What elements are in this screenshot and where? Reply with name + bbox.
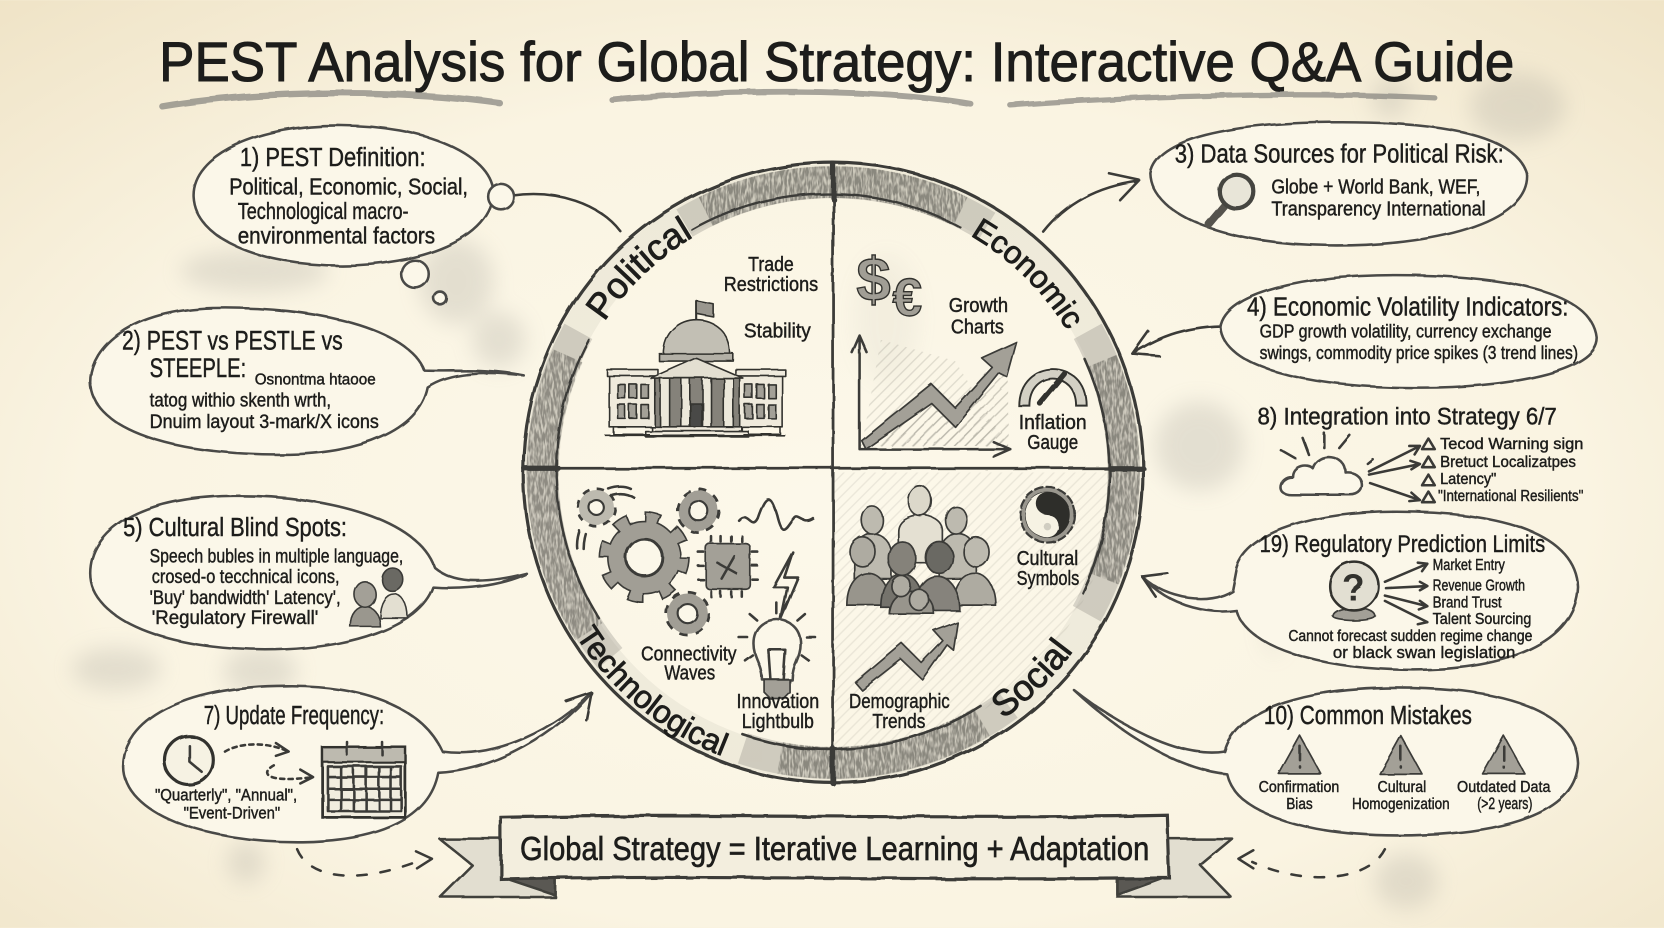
central PEST circle: [514, 160, 1180, 786]
icon: microchip: [698, 536, 758, 597]
text: inflation gauge: [1019, 412, 1087, 454]
icon: connectivity wave: [739, 499, 813, 530]
text: affected areas: Talent Sourcing: [1433, 611, 1531, 628]
text: growth charts: [949, 295, 1008, 338]
political quadrant: [605, 254, 818, 436]
icon: dollar and euro symbols: $: [856, 246, 891, 315]
connector arrows: [513, 173, 1220, 356]
text: sources: Transparency International: [1271, 199, 1486, 221]
text: mistake labels: Cultural: [1377, 779, 1426, 796]
label: Political: Political: [585, 215, 692, 320]
text: cultural blind spots: [123, 514, 403, 629]
text: cultural blind spots: 'Regulatory Firewall': [152, 608, 318, 629]
text: cultural symbols: Symbols: [1017, 568, 1079, 590]
panel: 7 update frequency: [123, 686, 591, 842]
panel: 5 cultural blind spots: [90, 496, 526, 650]
text: conclusion: Global Strategy = Iterative Learning + Adaptation: [520, 830, 1149, 867]
ring outlines: [523, 163, 1143, 783]
icon: warning triangles: [1279, 736, 1525, 774]
text: frequency labels: [155, 785, 297, 822]
bubble: [1074, 688, 1578, 835]
thought bubble: [193, 125, 514, 305]
dashed arrow left to banner: [297, 849, 432, 876]
text: caption: or black swan legislation: [1333, 643, 1515, 662]
text: affected areas: Revenue Growth: [1433, 577, 1525, 594]
text: sources: [1271, 176, 1486, 221]
text: caption: Cannot forecast sudden regime change: [1288, 628, 1533, 645]
ring soft tone: [542, 182, 1124, 763]
label: Technological: Technological: [580, 623, 730, 756]
title: PEST Analysis for Global Strategy: Interactive Q&A Guide: [159, 31, 1514, 93]
panel: 10 common mistakes: [1074, 688, 1578, 835]
list: warning items: Tecod Warning sign: [1440, 436, 1583, 453]
text: comparison: STEEPLE:: [150, 353, 246, 383]
banner: conclusion ribbon: [439, 815, 1232, 897]
list: warning items: "International Resilients": [1438, 488, 1583, 505]
text: affected areas: [1433, 557, 1531, 628]
economic quadrant: [852, 246, 1087, 457]
social quadrant shading: [833, 472, 1120, 759]
text: frequency labels: "Quarterly", "Annual",: [155, 785, 297, 804]
text: comparison: tatog withio skenth wrth,: [150, 391, 331, 412]
speech bubble: [90, 496, 526, 650]
text: definition: Technological macro-: [238, 198, 409, 224]
text: connectivity waves: Connectivity: [641, 643, 737, 665]
text: trade restrictions: Trade: [748, 254, 794, 276]
text: comparison: Dnuim layout 3-mark/X icons: [150, 412, 379, 433]
icon: lightning bolt: [774, 552, 798, 618]
ribbon tails: [439, 839, 1232, 897]
text: volatility: 4) Economic Volatility Indicators:: [1247, 293, 1568, 321]
text: cultural symbols: Cultural: [1017, 548, 1078, 570]
text: demographic trends: Trends: [872, 711, 925, 733]
icon: fan arrows: [1385, 563, 1427, 624]
list: warning items: [1422, 436, 1583, 505]
icon: inflation gauge: [1019, 369, 1087, 406]
icon: growth chart: [852, 336, 1017, 457]
text: definition: environmental factors: [238, 222, 435, 248]
social quadrant: [847, 486, 1079, 733]
text: affected areas: Brand Trust: [1433, 594, 1502, 611]
icon: fan arrows: [1369, 446, 1420, 501]
text: connectivity waves: Waves: [664, 662, 715, 684]
icon: dollar and euro symbols: [856, 246, 922, 327]
icon: yin yang cultural symbol: [1020, 487, 1075, 543]
text: heading: 10) Common Mistakes: [1264, 702, 1472, 730]
icon: government building: [605, 301, 785, 436]
label: Economic: Economic: [972, 218, 1080, 328]
icon: gears: [577, 486, 716, 632]
text: mistake labels: Outdated Data: [1457, 779, 1551, 796]
panel: 3 data sources: [1150, 122, 1527, 245]
icon: two people: [350, 568, 408, 626]
economic quadrant shading: [862, 340, 1008, 446]
icon: magnifying glass: [1209, 174, 1253, 224]
text: heading: 19) Regulatory Prediction Limits: [1260, 531, 1545, 558]
text: mistake labels: Bias: [1286, 796, 1313, 813]
icon: lightbulb: [739, 603, 815, 699]
text: frequency labels: "Event-Driven": [184, 803, 280, 822]
text: comparison: Osnontma htaooe: [255, 371, 376, 388]
text: mistake labels: Homogenization: [1352, 796, 1450, 813]
icon: demographic trend arrow: [855, 622, 957, 690]
bubble: [1142, 512, 1578, 670]
text: inflation gauge: Gauge: [1027, 432, 1078, 454]
text: volatility: [1247, 293, 1578, 363]
icon: crowd of people: [847, 486, 995, 614]
text: trade restrictions: Restrictions: [724, 274, 818, 296]
text: comparison: [122, 325, 379, 433]
text: definition: 1) PEST Definition:: [240, 144, 426, 172]
text: cultural blind spots: 5) Cultural Blind Spots:: [123, 514, 347, 542]
ring base tone: [540, 180, 1126, 765]
panel: 9 regulatory prediction limits: [1142, 512, 1578, 670]
ribbon body: [501, 815, 1169, 879]
icon: crystal ball: [1330, 562, 1379, 621]
text: cultural blind spots: 'Buy' bandwidth' Latency',: [150, 588, 341, 609]
ring shading: [543, 182, 1124, 763]
text: cultural symbols: [1017, 548, 1079, 590]
icon: clock: [164, 736, 213, 784]
list: warning items: Bretuct Localizatpes: [1440, 454, 1576, 471]
icon: calendar: [323, 742, 405, 817]
text: heading: 3) Data Sources for Political Risk:: [1175, 141, 1504, 169]
text: caption: [1288, 628, 1533, 662]
arrow head to circle: [1142, 573, 1167, 597]
bubble: [1220, 275, 1597, 388]
text: innovation lightbulb: Lightbulb: [742, 711, 814, 733]
dashed arrow right to banner: [1238, 849, 1385, 877]
text: definition: [229, 144, 468, 248]
text: definition: Political, Economic, Social,: [229, 173, 468, 199]
panel: 2 PEST vs PESTLE vs STEEPLE: [90, 308, 524, 454]
text: mistake labels: (>2 years): [1477, 794, 1532, 813]
bubble: [1150, 122, 1527, 245]
icon: cloud with arrows: [1280, 432, 1372, 495]
text: mistake labels: [1259, 779, 1551, 813]
icon: crystal ball: ?: [1342, 567, 1364, 608]
text: cultural blind spots: crosed-o tecchnical icons,: [152, 567, 340, 588]
text: stability: Stability: [744, 321, 812, 343]
arrow to circle: [566, 692, 591, 720]
text: affected areas: Market Entry: [1433, 557, 1505, 574]
technological quadrant: [577, 486, 819, 733]
icon: dollar and euro symbols: €: [892, 268, 922, 327]
speech bubble: [90, 308, 524, 454]
text: volatility: swings, commodity price spikes (3 trend lines): [1260, 343, 1578, 363]
text: trade restrictions: [724, 254, 818, 296]
text: growth charts: Charts: [951, 316, 1004, 338]
panel: 8 integration into strategy: [1258, 404, 1583, 505]
label: Social: Social: [992, 636, 1072, 716]
text: comparison: 2) PEST vs PESTLE vs: [122, 325, 343, 355]
text: innovation lightbulb: Innovation: [736, 691, 819, 713]
text: inflation gauge: Inflation: [1019, 412, 1087, 434]
list: warning items: Latency": [1440, 471, 1496, 488]
text: volatility: GDP growth volatility, currency exchange: [1260, 322, 1552, 342]
speech bubble: [123, 686, 591, 842]
text: heading: 8) Integration into Strategy 6/7: [1258, 404, 1557, 431]
text: heading: 7) Update Frequency:: [204, 702, 384, 730]
text: innovation lightbulb: [736, 691, 819, 733]
text: demographic trends: Demographic: [849, 691, 950, 713]
text: mistake labels: Confirmation: [1259, 779, 1339, 796]
title underline strokes: [162, 92, 1435, 106]
panel: 1 PEST definition: [193, 125, 514, 305]
text: cultural blind spots: Speech bubles in multiple language,: [150, 547, 403, 568]
text: connectivity waves: [641, 643, 737, 684]
panel: 4 economic volatility: [1220, 275, 1597, 388]
icon: dashed cycle arrows: [225, 743, 313, 783]
text: growth charts: Growth: [949, 295, 1008, 317]
text: sources: Globe + World Bank, WEF,: [1271, 176, 1480, 198]
text: demographic trends: [849, 691, 950, 733]
